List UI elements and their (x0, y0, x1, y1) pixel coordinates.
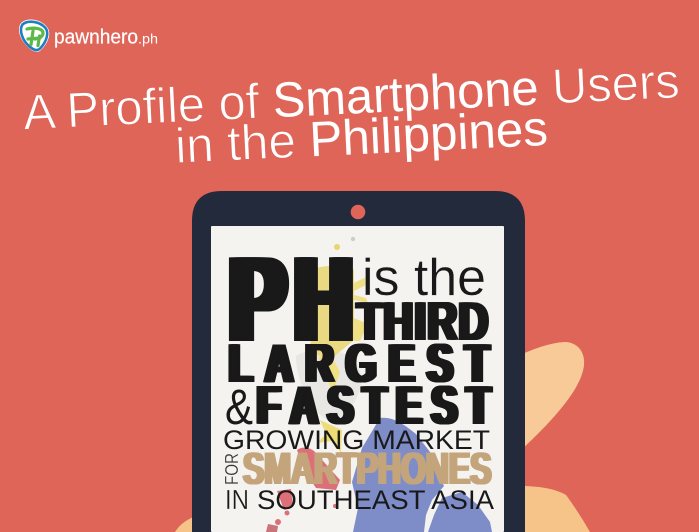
title line 2: in the Philippines (174, 101, 549, 174)
logo wordmark: pawnhero (54, 26, 138, 48)
icon: pawnhero shield (19, 20, 49, 52)
decorative peach blob lower right (520, 486, 590, 532)
tablet (192, 191, 525, 532)
blue map islands (352, 418, 492, 532)
logo: pawnhero.ph (19, 20, 158, 52)
tablet screen (211, 226, 504, 532)
headline is the: is the (362, 249, 486, 307)
headline SOUTHEAST ASIA: SOUTHEAST ASIA (257, 485, 494, 515)
headline H of PH: H (295, 231, 352, 367)
headline P of PH: P (230, 231, 285, 367)
flag sun (310, 237, 370, 392)
headline GROWING MARKET: GROWING MARKET (223, 425, 490, 455)
headline SMARTPHONES: SMARTPHONES (242, 443, 491, 494)
headline FASTEST: FASTEST (257, 374, 500, 436)
headline ampersand: & (225, 379, 253, 435)
title line 1: A Profile of Smartphone Users (22, 53, 681, 140)
red map islands (266, 448, 340, 532)
logo: pawnhero.ph: .ph (138, 32, 158, 46)
flag star (317, 420, 342, 453)
tablet body (192, 191, 525, 532)
decorative peach blob lower left (175, 515, 200, 532)
grey smudge (296, 349, 361, 422)
title (22, 53, 681, 174)
headline IN: IN (225, 484, 249, 515)
tablet camera (351, 205, 365, 219)
headline LARGEST: LARGEST (229, 332, 502, 394)
flag map artwork (266, 237, 492, 532)
decorative peach blob upper right (520, 342, 584, 451)
headline FOR: FOR (222, 453, 242, 485)
headline THIRD: THIRD (357, 290, 490, 352)
